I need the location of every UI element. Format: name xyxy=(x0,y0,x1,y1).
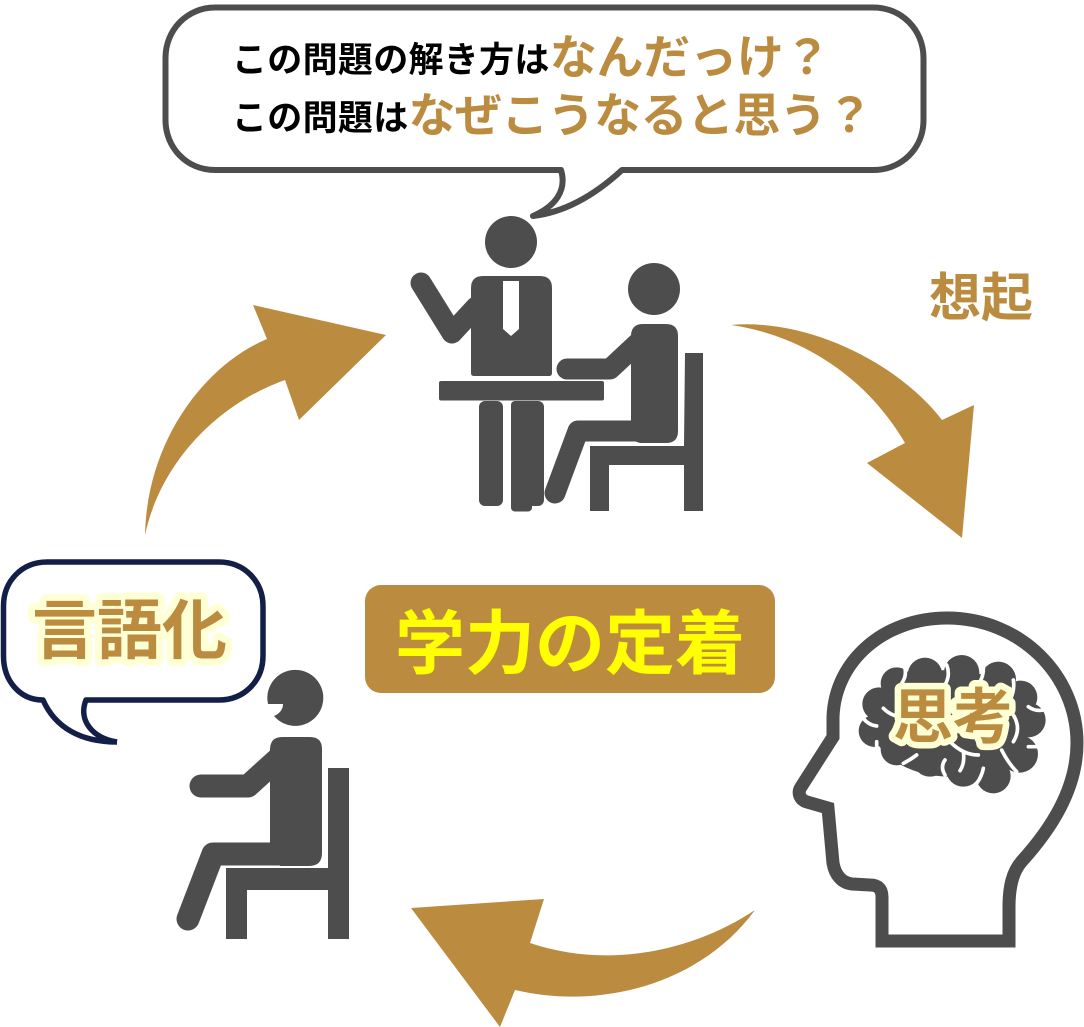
torso and arm xyxy=(201,737,322,866)
arrow: top left xyxy=(145,305,386,535)
leg xyxy=(188,854,285,919)
teacher legs xyxy=(479,401,544,512)
chair xyxy=(226,768,349,939)
speech bubble: verbalization xyxy=(4,562,263,742)
center title text: 学力の定着 xyxy=(395,605,745,683)
icon: teacher and student at desk xyxy=(421,216,703,512)
icon: seated student speaking xyxy=(188,670,349,939)
question line 2: この問題は xyxy=(232,99,409,138)
head outline xyxy=(799,618,1077,941)
question line 2: なぜこうなると思う？ xyxy=(409,89,873,142)
icon: head with brain xyxy=(799,618,1077,941)
question line 1: なんだっけ？ xyxy=(550,31,831,84)
head with open mouth xyxy=(267,670,323,726)
question line 1: この問題の解き方は xyxy=(232,41,550,80)
student chair xyxy=(590,353,703,511)
student figure xyxy=(555,263,680,493)
speech bubble: teacher's questions xyxy=(166,8,924,216)
center title box xyxy=(365,585,775,693)
arrow: bottom xyxy=(411,899,755,1027)
label: recall: 想起 xyxy=(929,270,1033,328)
brain xyxy=(859,655,1046,793)
teacher figure xyxy=(421,216,552,376)
label: thinking: 思考 xyxy=(893,684,1013,751)
label: verbalization: 言語化 xyxy=(32,594,227,667)
desk xyxy=(439,381,604,400)
arrow: recall, top right xyxy=(731,324,974,538)
